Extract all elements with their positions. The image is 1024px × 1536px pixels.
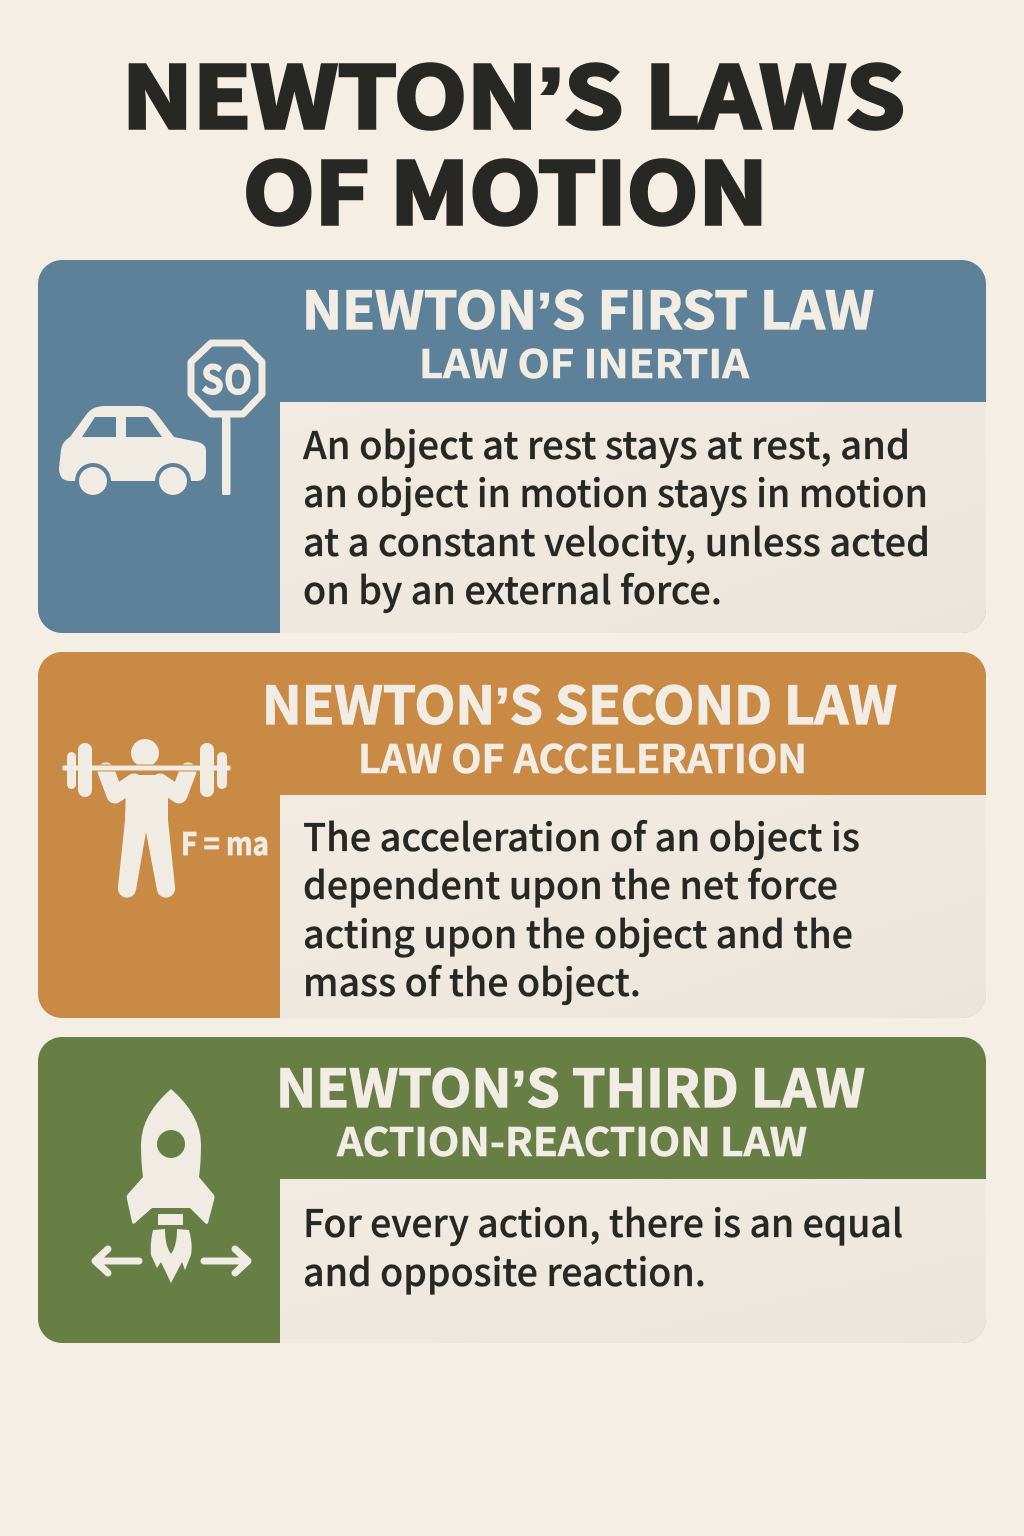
text block: second law description: dependent upon the net force [303, 855, 838, 910]
panel background: green [38, 1037, 986, 1343]
title: OF MOTION [243, 126, 768, 249]
text block: second law description: acting upon the object and the [303, 904, 853, 959]
panel: first law [38, 260, 986, 633]
arrow: left [95, 1249, 139, 1273]
text block: first law description: an object in motion stays in motion [303, 463, 928, 518]
body area [280, 1179, 986, 1343]
panel background: orange [38, 652, 986, 1018]
icon: weightlifter [62, 739, 231, 898]
icon: stop sign: SO [201, 348, 252, 406]
panel: third law [38, 1037, 986, 1343]
subheading: action-reaction law: ACTION-REACTION LAW [336, 1112, 807, 1168]
panel background: blue [38, 260, 986, 633]
title: NEWTON ’S LAWS [122, 30, 905, 153]
heading: second law: NEWTON’S SECOND LAW [262, 664, 897, 739]
text block: first law description [303, 415, 930, 615]
icon: rocket [95, 1089, 248, 1283]
formula: F = ma: F = ma [181, 819, 269, 864]
icon: stop sign [191, 343, 262, 495]
text block: first law description: An object at rest stays at rest, and [303, 415, 910, 470]
text block: second law description: The acceleration of an object is [303, 807, 860, 862]
text block: second law description: mass of the object. [303, 952, 641, 1007]
panel: second law [38, 652, 986, 1018]
text block: third law description: For every action, there is an equal [303, 1193, 903, 1248]
heading: first law: NEWTON’S FIRST LAW [302, 269, 874, 344]
title [122, 30, 905, 249]
body area [280, 402, 986, 633]
icon: car [59, 406, 206, 500]
subheading: law of acceleration: LAW OF ACCELERATION [358, 729, 807, 785]
subheading: law of inertia: LAW OF INERTIA [419, 334, 750, 390]
heading: third law: NEWTON’S THIRD LAW [276, 1047, 865, 1122]
text block: first law description: at a constant velocity, unless acted [303, 512, 930, 567]
text block: third law description [303, 1193, 903, 1297]
text block: first law description: on by an external force. [303, 560, 722, 615]
text block: second law description [303, 807, 860, 1007]
text block: third law description: and opposite reaction. [303, 1242, 706, 1297]
body area [280, 795, 986, 1018]
arrow: right [204, 1249, 248, 1273]
